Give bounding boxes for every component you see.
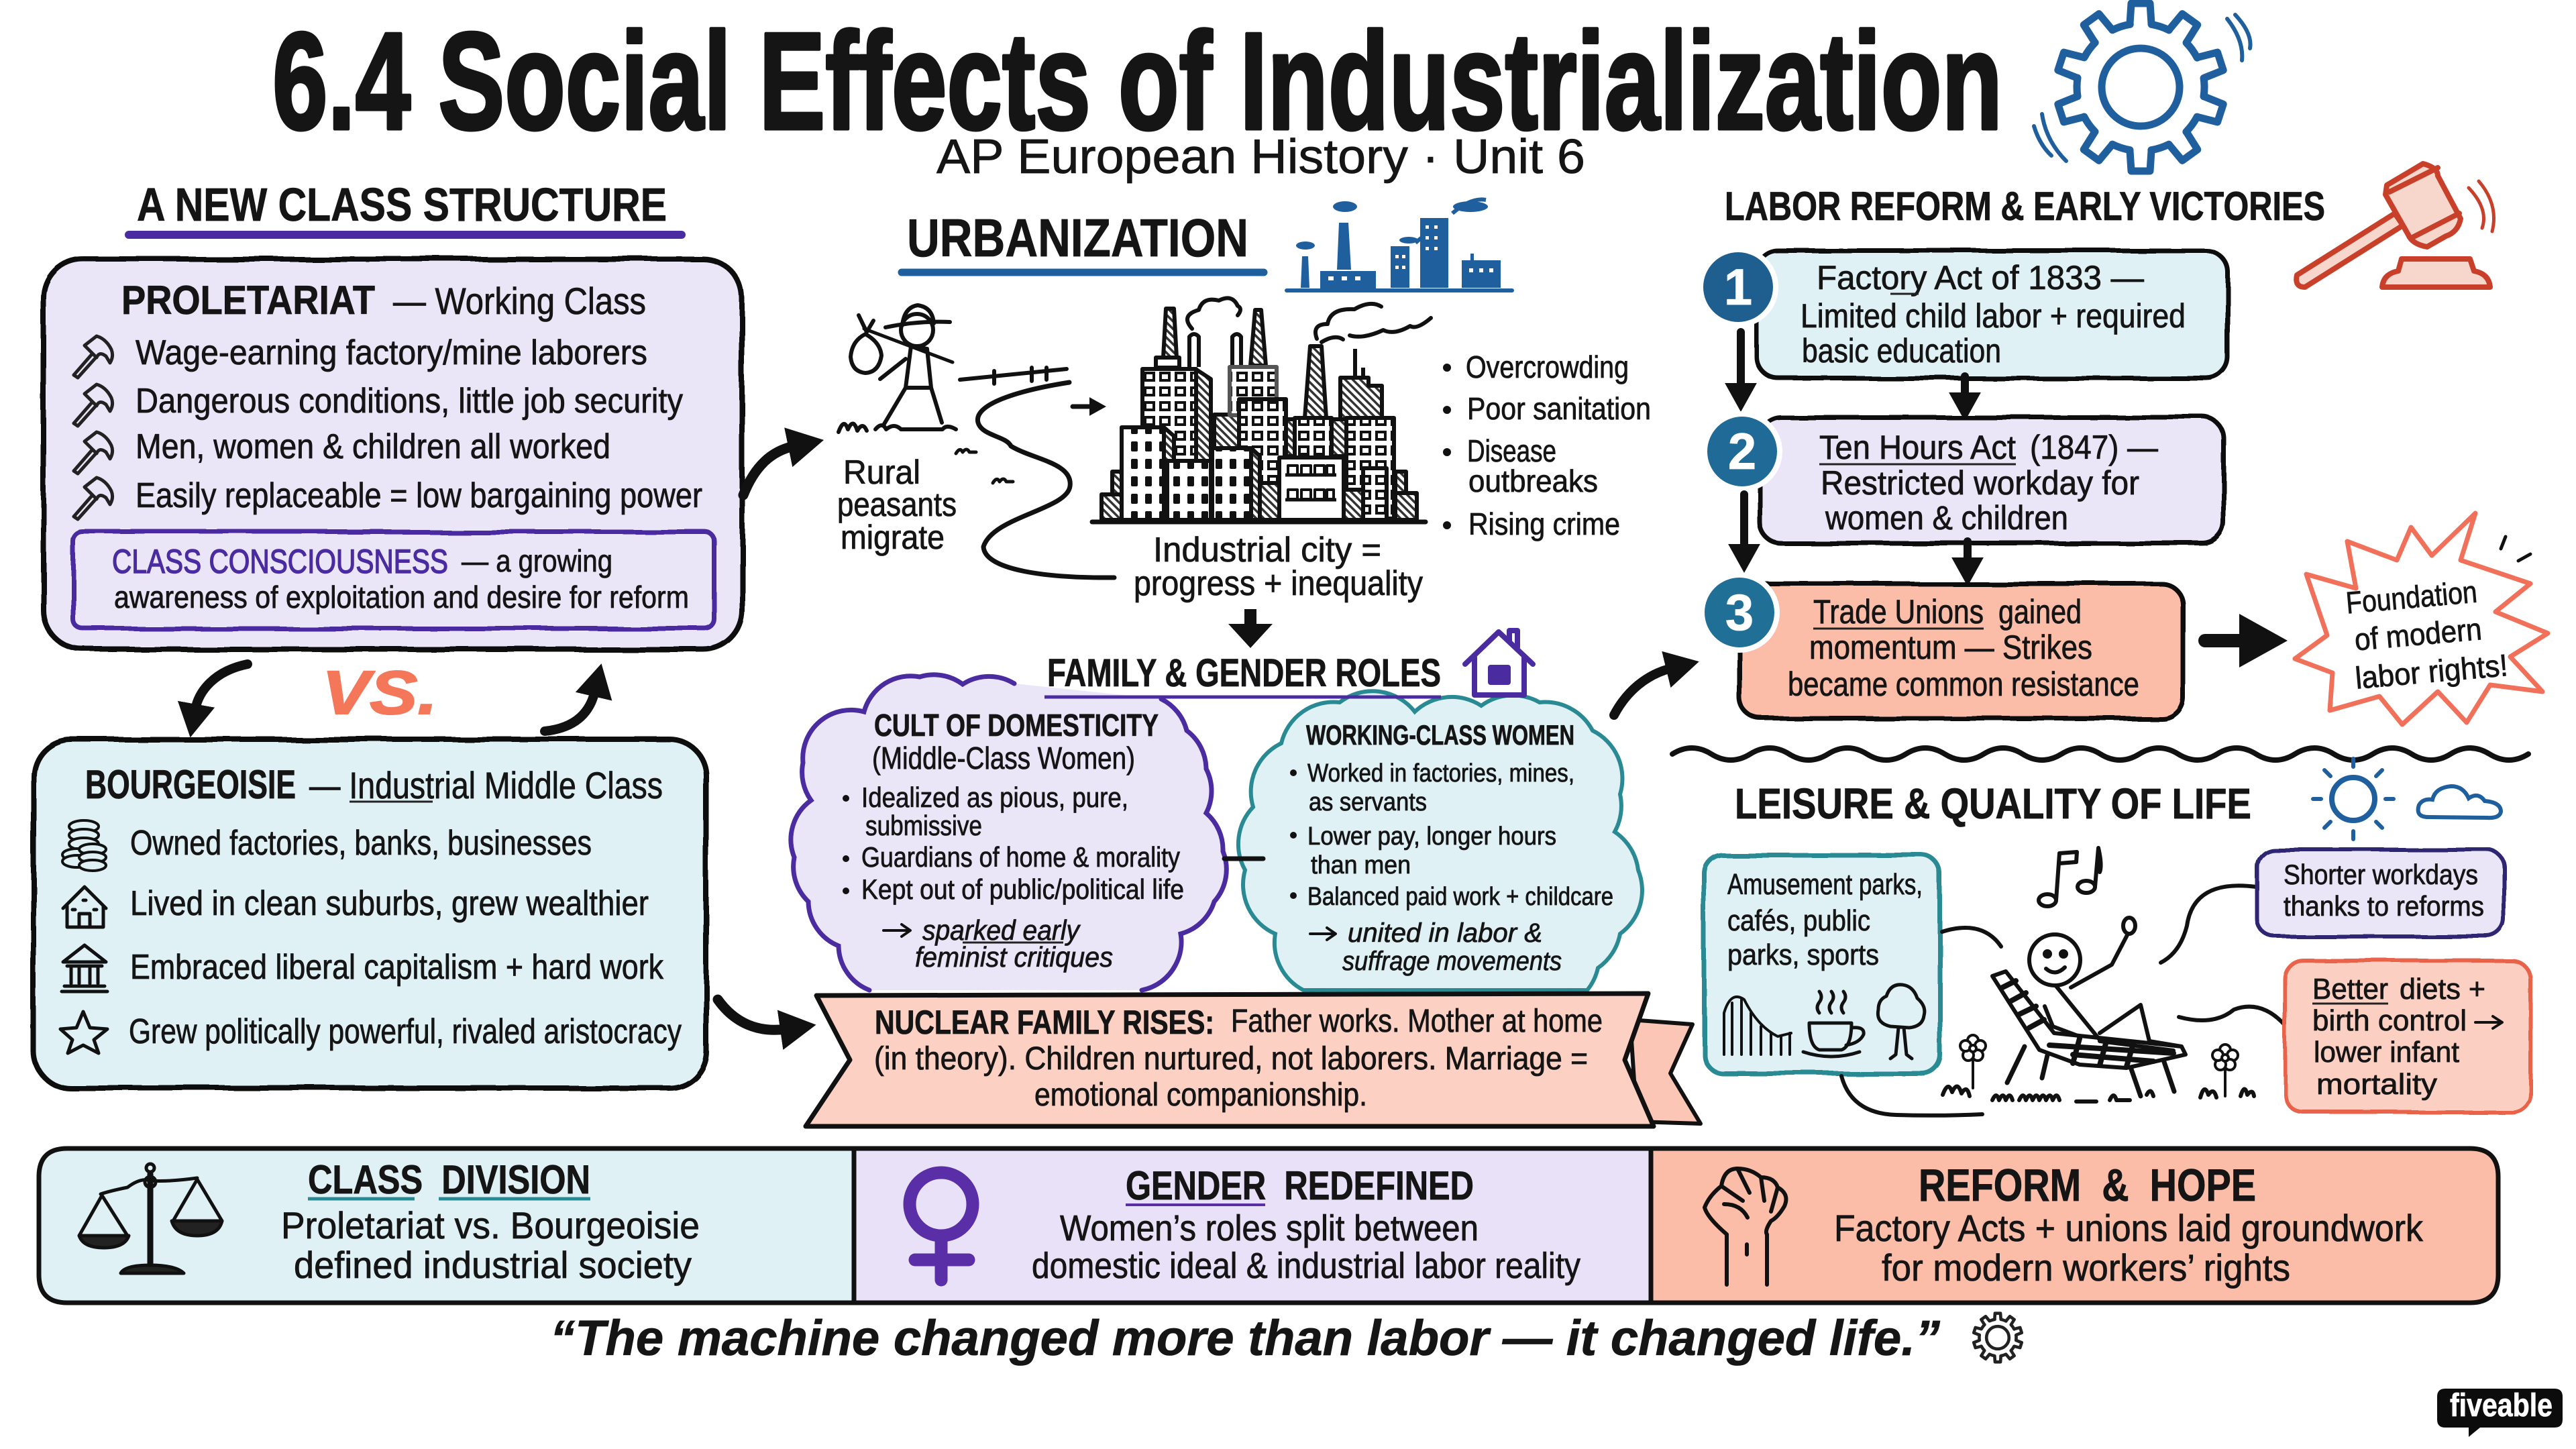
proletariat bullet list: Wage-earning factory/mine laborers [136, 333, 647, 372]
working women heading: WORKING-CLASS WOMEN [1306, 719, 1574, 751]
list: urban problems: Rising crime [1468, 506, 1620, 541]
proletariat bullet list: Easily replaceable = low bargaining power [136, 476, 702, 515]
factory act text: basic education [1802, 332, 2001, 370]
summary panel: class division: Proletariat vs. Bourgeoisie [281, 1204, 700, 1246]
cult outcome: sparked early [922, 914, 1081, 946]
subtitle: AP European History · Unit 6 [936, 130, 1585, 184]
cult bullets: submissive [865, 810, 982, 841]
amusements text: parks, sports [1727, 938, 1879, 971]
summary panel: reform and hope [1651, 1148, 2498, 1303]
callout: class consciousness: CLASS CONSCIOUSNESS [112, 543, 448, 580]
proletariat bullet list: Men, women & children all worked [136, 427, 610, 466]
ten hours text: Ten Hours Act [1819, 429, 2016, 466]
ten hours text: (1847) — [2030, 429, 2158, 466]
cult bullets: Idealized as pious, pure, [861, 782, 1128, 813]
number badge 3: 3 [1725, 584, 1754, 641]
factory act text: Factory Act of 1833 — [1817, 259, 2144, 297]
bourgeoisie heading: BOURGEOISIE [85, 762, 296, 807]
cult subheading: (Middle-Class Women) [872, 741, 1135, 775]
ten hours text [1819, 429, 2158, 537]
arrow: proletariat to bourgeoisie [195, 664, 248, 710]
number badge 3 [1699, 572, 1780, 653]
working women bullets: Lower pay, longer hours [1307, 822, 1556, 851]
working women outcome [1310, 918, 1562, 976]
cult bullets [843, 782, 1184, 905]
list: urban problems: Overcrowding [1466, 350, 1629, 384]
panel: shorter workdays: Shorter workdays [2284, 859, 2478, 890]
cult heading: CULT OF DOMESTICITY [874, 708, 1159, 743]
factory act text [1801, 259, 2186, 370]
icon: coffee cup [1803, 991, 1864, 1057]
icon: music notes [2039, 848, 2101, 906]
ten hours text: women & children [1825, 499, 2068, 537]
number badge 1 [1698, 247, 1778, 327]
summary panel: gender redefined: domestic ideal & industrial labor reality [1032, 1246, 1580, 1286]
heading: leisure: LEISURE & QUALITY OF LIFE [1735, 780, 2251, 828]
label: industrial city: progress + inequality [1134, 564, 1423, 603]
trade unions text: became common resistance [1788, 665, 2139, 703]
heading: family and gender roles: FAMILY & GENDER ROLES [1047, 651, 1441, 695]
trade unions text: momentum — Strikes [1809, 629, 2092, 666]
heading: a new class structure: A NEW CLASS STRUCTURE [137, 178, 667, 231]
summary panel: class division [39, 1148, 854, 1303]
callout: class consciousness: — a growing [462, 543, 612, 578]
panel: better diets [2285, 961, 2530, 1112]
callout: class consciousness: awareness of exploitation and desire for reform [114, 580, 689, 614]
panel: amusements [1705, 855, 1940, 1073]
amusements text [1727, 868, 1923, 971]
callout: foundation of modern labor rights [2295, 513, 2548, 724]
cult outcome: feminist critiques [915, 941, 1113, 973]
bourgeoisie bullet list: Grew politically powerful, rivaled aristocracy [129, 1012, 682, 1051]
label: industrial city [1134, 531, 1423, 603]
banner text [874, 1004, 1603, 1113]
heading: labor reform: LABOR REFORM & EARLY VICTORIES [1725, 184, 2325, 229]
cloud: cult of domesticity [791, 675, 1226, 990]
trade unions text [1788, 593, 2139, 703]
panel: shorter workdays: thanks to reforms [2284, 890, 2484, 922]
banner tail [1630, 1020, 1701, 1124]
cult outcome [883, 914, 1113, 973]
bourgeoisie subheading: — Industrial Middle Class [309, 764, 663, 806]
arrow: proletariat to urbanization [743, 446, 794, 495]
label: rural peasants: peasants [837, 486, 957, 523]
icon: raised fist [1705, 1169, 1786, 1285]
icon: migrating peasant [839, 305, 956, 432]
bourgeoisie bullet list: Owned factories, banks, businesses [130, 824, 592, 863]
panel: ten hours act [1702, 411, 2224, 543]
panel: bourgeoisie [34, 739, 706, 1088]
working women bullets: Worked in factories, mines, [1307, 759, 1574, 788]
icon: cloud [2418, 786, 2501, 818]
amusements text: cafés, public [1727, 904, 1870, 937]
arrow: step 1 to 2 center [1961, 376, 1969, 397]
list: urban problems [1443, 350, 1651, 541]
icon: small gear [1974, 1313, 2022, 1362]
arrow: family to reform [1614, 668, 1672, 715]
icon: winding road and fence [956, 368, 1114, 578]
panel: better diets: Better [2312, 973, 2388, 1006]
label: industrial city: Industrial city = [1153, 531, 1381, 570]
panel: factory act [1698, 247, 2228, 378]
reform and hope text: REFORM & HOPE [1919, 1160, 2256, 1211]
summary panel: reform and hope: for modern workers’ rights [1882, 1246, 2290, 1289]
icon: gavel [2296, 164, 2494, 287]
arrow: bourgeoisie to proletariat [545, 691, 595, 731]
panel: trade unions [1699, 572, 2183, 718]
list: urban problems: Poor sanitation [1467, 391, 1651, 426]
ten hours text: Restricted workday for [1821, 464, 2139, 502]
summary panel: reform and hope: Factory Acts + unions laid groundwork [1834, 1207, 2424, 1249]
proletariat bullet list [136, 333, 702, 515]
connector lines to relaxed figure [1841, 885, 2284, 1116]
icon: flowers [1960, 1035, 2238, 1070]
icon: scales [79, 1164, 222, 1273]
icon: tree [1878, 985, 1925, 1059]
icon: coins [62, 820, 106, 871]
banner text: (in theory). Children nurtured, not laborers. Marriage = [874, 1041, 1588, 1077]
banner text: NUCLEAR FAMILY RISES: [875, 1004, 1214, 1041]
proletariat heading: PROLETARIAT [121, 278, 375, 323]
label: rural peasants [837, 453, 957, 556]
heading: urbanization: URBANIZATION [907, 208, 1248, 268]
trade unions text: Trade Unions [1813, 593, 1984, 631]
cult bullets: Guardians of home & morality [861, 841, 1180, 873]
label: versus: VS. [322, 659, 437, 727]
working women bullets: than men [1311, 851, 1411, 879]
summary panel: gender redefined: Women’s roles split between [1060, 1208, 1479, 1248]
icon: blue factory skyline [1287, 199, 1512, 290]
working women outcome: united in labor & [1348, 918, 1542, 948]
cloud: working-class women [1238, 691, 1642, 990]
icon: blue gear [2034, 3, 2251, 171]
icon: venus symbol [910, 1173, 973, 1280]
trade unions text: gained [1998, 593, 2082, 631]
arrow: road to city [1073, 404, 1092, 409]
panel: better diets: diets + [2400, 973, 2485, 1006]
working women bullets [1290, 759, 1613, 911]
illustration: relaxed stick figure on lounge chair [1943, 918, 2254, 1102]
panel: shorter workdays [2257, 850, 2504, 936]
arrow: step 1 to 2 left [1737, 332, 1745, 388]
label: rural peasants: Rural [843, 453, 920, 491]
logo: fiveable [2437, 1388, 2563, 1437]
bourgeoisie bullet list [129, 824, 682, 1051]
summary bar [39, 1148, 2498, 1303]
panel: proletariat [44, 259, 742, 649]
bourgeoisie bullet list: Lived in clean suburbs, grew wealthier [130, 884, 649, 923]
connector between clouds [1224, 856, 1263, 861]
number badge 1: 1 [1724, 259, 1752, 316]
list: urban problems: outbreaks [1468, 464, 1598, 498]
number badge 2 [1702, 411, 1782, 492]
banner text: Father works. Mother at home [1231, 1004, 1603, 1039]
proletariat bullet list: Dangerous conditions, little job security [136, 382, 683, 421]
panel: better diets: birth control [2312, 1004, 2467, 1037]
cult bullets: Kept out of public/political life [861, 873, 1184, 905]
icon: star [60, 1012, 107, 1053]
icon: sun [2313, 759, 2394, 839]
summary panel: class division: defined industrial society [294, 1244, 692, 1286]
working women outcome: suffrage movements [1342, 947, 1562, 976]
icon: hammers [74, 336, 113, 519]
banner text: emotional companionship. [1034, 1077, 1367, 1113]
icon: roller coaster [1724, 997, 1791, 1055]
panel: better diets: lower infant [2314, 1036, 2459, 1069]
wavy divider [1672, 748, 2528, 760]
working women bullets: as servants [1309, 788, 1427, 816]
working women bullets: Balanced paid work + childcare [1307, 883, 1613, 911]
arrow: step 2 to 3 left [1740, 494, 1748, 549]
callout: class consciousness [73, 532, 714, 629]
panel: better diets: mortality [2316, 1068, 2437, 1101]
arrow: unions to foundation [2205, 634, 2247, 647]
arrow: bourgeoisie to nuclear family [718, 1000, 786, 1030]
gender redefined text: GENDER REDEFINED [1126, 1163, 1474, 1208]
arrow: step 2 to 3 center [1964, 541, 1972, 562]
banner: nuclear family rises [806, 994, 1701, 1126]
proletariat subheading: — Working Class [393, 280, 646, 322]
bourgeoisie bullet list: Embraced liberal capitalism + hard work [130, 948, 664, 987]
quote: “The machine changed more than labor — it changed life.” [550, 1310, 1940, 1366]
callout: foundation of modern labor rights: Foundation [2345, 574, 2479, 621]
arrow: city to family [1228, 609, 1273, 648]
summary panel: gender redefined [854, 1148, 1651, 1303]
factory act text: Limited child labor + required [1801, 297, 2186, 335]
callout: foundation of modern labor rights: labor rights! [2354, 647, 2509, 696]
icon: purple house [1465, 631, 1533, 695]
amusements text: Amusement parks, [1727, 868, 1923, 901]
callout: foundation of modern labor rights: of modern [2353, 611, 2483, 657]
label: rural peasants: migrate [841, 519, 945, 556]
list: urban problems: Disease [1467, 433, 1556, 468]
number badge 2: 2 [1728, 423, 1756, 480]
logo: fiveable: fiveable [2450, 1388, 2553, 1424]
class division text: CLASS DIVISION [308, 1157, 590, 1202]
icon: house [63, 887, 106, 927]
icon: industrial city [1092, 298, 1431, 522]
icon: bank [62, 945, 107, 991]
